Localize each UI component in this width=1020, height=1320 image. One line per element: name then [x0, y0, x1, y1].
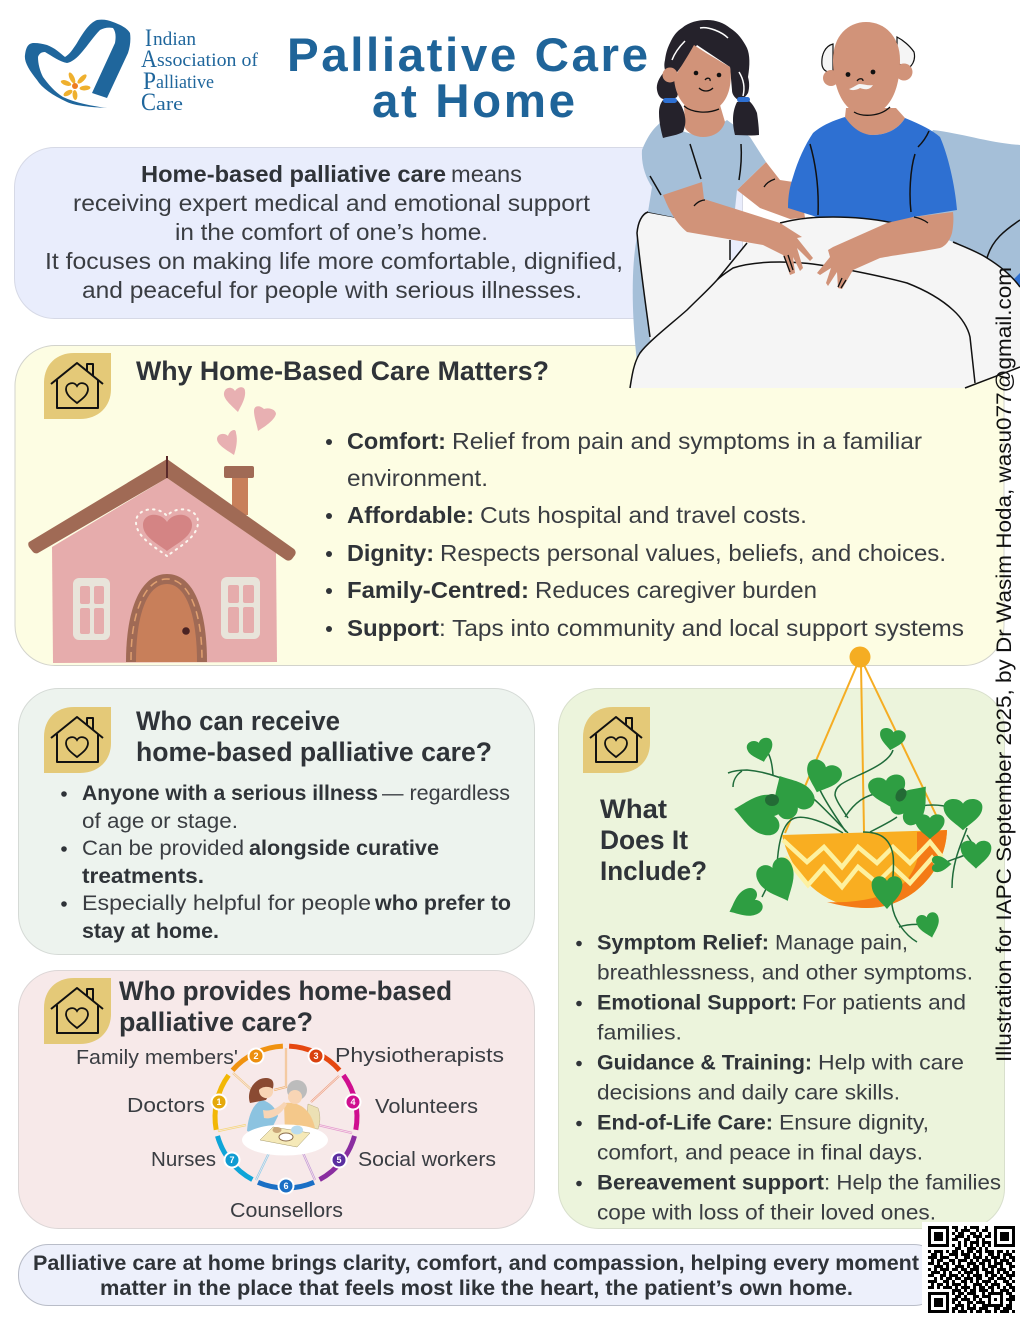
title: Palliative Care — [287, 29, 648, 82]
bullet list: Help with care — [818, 1050, 964, 1074]
bullet list: : Help the families — [824, 1170, 1001, 1194]
wheel labels: Physiotherapists — [335, 1044, 504, 1067]
icon: house badge — [583, 707, 650, 773]
bullet list: families. — [597, 1020, 682, 1044]
bullet list: Anyone with a serious illness — [82, 781, 378, 805]
bullet list: Reduces caregiver burden — [535, 577, 817, 603]
bullet list: alongside curative — [249, 836, 439, 860]
numbered badges: 7 — [229, 1155, 235, 1165]
bullet list: Ensure dignity, — [779, 1110, 929, 1134]
logo text: A — [141, 46, 157, 73]
bullet list: Emotional Support: — [597, 990, 797, 1014]
vertical credit text: Illustration for IAPC September 2025, by Dr Wasim Hoda, wasu077@gmail.com — [992, 267, 1016, 1062]
icon: heart ribbon — [25, 20, 130, 108]
heading: Does It — [600, 825, 688, 855]
icon: house badge — [44, 353, 111, 419]
bullet list: of age or stage. — [82, 809, 238, 833]
wheel labels: Volunteers — [375, 1095, 478, 1118]
bullet list: Cuts hospital and travel costs. — [480, 502, 807, 528]
girl's far arm — [737, 162, 805, 219]
wheel labels: Family members' — [76, 1046, 238, 1069]
blanket — [630, 217, 1020, 388]
girl: hair — [664, 20, 749, 100]
man: blue shirt — [788, 117, 957, 226]
wheel spokes — [218, 1048, 352, 1180]
panel: why home-based care matters — [15, 346, 1004, 666]
numbered badges: 5 — [336, 1155, 342, 1165]
wheel labels: Counsellors — [230, 1199, 343, 1222]
heading: Include? — [600, 856, 707, 886]
illustration: girl comforting elderly man in bed — [630, 20, 1020, 388]
man's arm and hand — [817, 212, 953, 289]
bullet list: — regardless — [382, 781, 510, 805]
roof — [28, 459, 296, 561]
wheel arcs — [215, 1046, 357, 1188]
leaves — [724, 727, 991, 941]
hook — [850, 646, 870, 668]
bullet list: Affordable: — [347, 502, 474, 528]
numbered badges: 6 — [283, 1181, 289, 1191]
title — [287, 29, 648, 128]
heading — [119, 976, 452, 1037]
logo text — [141, 25, 259, 116]
intro text: receiving expert medical and emotional support — [73, 190, 590, 216]
icon: sun flower — [60, 72, 91, 100]
heading: Who can receive — [136, 706, 340, 736]
chart: care team wheel — [76, 1044, 504, 1222]
heading — [136, 706, 492, 767]
panel: what does it include — [558, 688, 1004, 1228]
bullet list: environment. — [347, 465, 488, 491]
illustration: pink house — [28, 387, 296, 663]
bullet list: comfort, and peace in final days. — [597, 1140, 923, 1164]
heading: home-based palliative care? — [136, 737, 492, 767]
bullet list: Relief from pain and symptoms in a familiar — [452, 428, 922, 454]
bullet list: : Taps into community and local support systems — [439, 615, 964, 641]
closing message banner — [18, 1244, 944, 1306]
numbered badges: 1 — [216, 1097, 222, 1107]
panel: who provides — [18, 970, 534, 1228]
bullet list — [326, 428, 964, 641]
girl: face — [662, 68, 678, 82]
heading — [600, 794, 707, 886]
house wall — [52, 478, 277, 663]
bullet list: Dignity: — [347, 540, 434, 566]
logo text: alliative — [156, 73, 214, 93]
intro text: It focuses on making life more comfortable, dignified, — [45, 248, 623, 274]
numbered badges: 3 — [313, 1051, 319, 1061]
bullet list: breathlessness, and other symptoms. — [597, 960, 973, 984]
icon: hearts from chimney — [217, 387, 276, 455]
bullet list — [61, 781, 511, 943]
care scene: caregiver feeding patient — [242, 1078, 328, 1156]
man: neck and head — [845, 108, 905, 135]
logo: Indian Association of Palliative Care — [25, 20, 259, 116]
bowl zigzag pattern — [783, 840, 942, 887]
bullet list: Manage pain, — [775, 930, 908, 954]
bullet list: who prefer to — [374, 891, 511, 915]
girl: pigtails — [659, 100, 685, 138]
wheel labels — [76, 1044, 504, 1222]
windows — [73, 578, 110, 640]
heading: Why Home-Based Care Matters? — [136, 356, 549, 386]
bowl — [782, 830, 947, 908]
bullet list: stay at home. — [82, 919, 219, 943]
wheel labels: Social workers — [358, 1148, 496, 1171]
icon: house badge — [44, 978, 111, 1044]
white pillow — [637, 212, 730, 340]
girl's near arm and hand — [663, 182, 813, 275]
title: at Home — [372, 75, 575, 128]
heading: palliative care? — [119, 1007, 313, 1037]
numbered badges: 4 — [350, 1097, 356, 1107]
wheel labels: Doctors — [127, 1094, 205, 1117]
bullet list: Can be provided — [82, 836, 244, 860]
QR code — [922, 1222, 1020, 1320]
intro text: means — [451, 161, 522, 187]
icon: house badge — [44, 707, 111, 773]
wall heart — [143, 515, 192, 551]
bullet list: End-of-Life Care: — [597, 1110, 773, 1134]
bullet list: cope with loss of their loved ones. — [597, 1200, 936, 1224]
illustration: hanging plant — [724, 646, 991, 942]
girl: shirt — [642, 120, 766, 217]
door — [126, 574, 207, 662]
logo text: C — [141, 89, 156, 116]
bowl shaded side — [827, 830, 947, 908]
intro text: and peaceful for people with serious illnesses. — [82, 277, 582, 303]
intro text — [45, 161, 623, 303]
bullet list: Guidance & Training: — [597, 1050, 812, 1074]
heading: Who provides home-based — [119, 976, 452, 1006]
numbered badges: 2 — [253, 1051, 259, 1061]
bullet list: Family-Centred: — [347, 577, 529, 603]
logo text: P — [143, 68, 156, 95]
chimney — [232, 477, 248, 515]
closing message banner: matter in the place that feels most like the heart, the patient’s own home. — [100, 1276, 853, 1300]
bullet list: Support — [347, 615, 439, 641]
bullet list — [576, 930, 1001, 1224]
girl: neck — [684, 105, 725, 137]
table — [242, 1124, 328, 1156]
logo text: are — [156, 95, 183, 115]
bullet list: treatments. — [82, 864, 204, 888]
numbered badges — [210, 1048, 362, 1194]
ropes — [785, 665, 937, 833]
panel: introduction — [14, 148, 742, 318]
wheel labels: Nurses — [151, 1148, 216, 1171]
plant stems behind bowl — [728, 750, 977, 897]
closing message banner: Palliative care at home brings clarity, comfort, and compassion, helping every moment — [33, 1251, 919, 1275]
bullet list: For patients and — [802, 990, 966, 1014]
logo text: ndian — [153, 30, 196, 50]
bullet list: Comfort: — [347, 428, 446, 454]
intro text: in the comfort of one’s home. — [175, 219, 488, 245]
bullet list: Symptom Relief: — [597, 930, 769, 954]
bullet list: decisions and daily care skills. — [597, 1080, 900, 1104]
panel: who can receive — [18, 688, 534, 954]
bullet list: Especially helpful for people — [82, 891, 371, 915]
heading: What — [600, 794, 667, 824]
bullet list: Bereavement support — [597, 1170, 824, 1194]
logo text: I — [145, 25, 152, 52]
back pillows — [900, 130, 1020, 300]
man: moustache — [849, 84, 873, 90]
intro text: Home-based palliative care — [141, 161, 446, 187]
bullet list: Respects personal values, beliefs, and choices. — [440, 540, 946, 566]
logo text: ssociation of — [157, 51, 259, 71]
trailing stems — [863, 832, 927, 942]
